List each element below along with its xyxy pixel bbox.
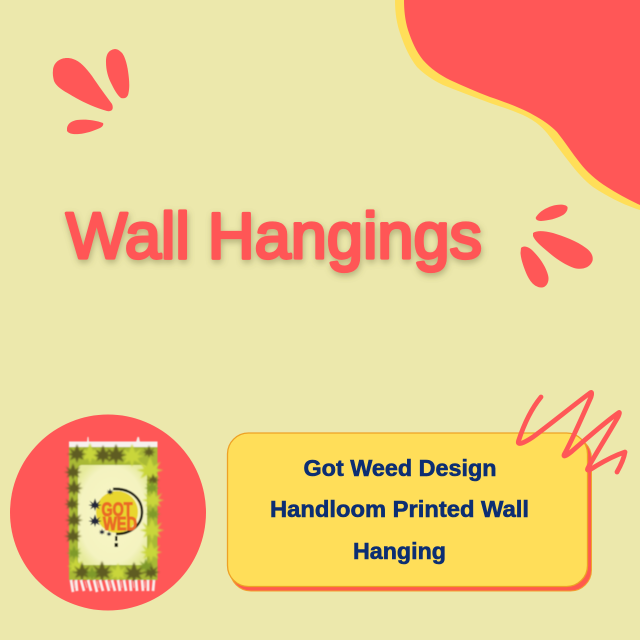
fringe — [71, 580, 154, 592]
Got Weed logo: WED — [103, 514, 137, 534]
corner blob: yellow outline and red shape — [395, 0, 640, 210]
card face — [228, 433, 588, 586]
splash icon right of title — [520, 205, 593, 288]
scribble decoration — [518, 392, 625, 472]
Got Weed logo — [88, 488, 142, 547]
logo wording: GOT — [102, 500, 133, 521]
logo disc — [96, 491, 138, 533]
hanging pins — [87, 437, 140, 442]
fabric — [69, 447, 158, 580]
splash icon top left — [53, 49, 129, 134]
title: Wall Hangings — [66, 199, 482, 272]
cream centre — [78, 465, 147, 565]
small leaf stars — [88, 488, 114, 536]
top rod — [69, 442, 158, 448]
logo ring — [113, 489, 142, 534]
question mark stem — [114, 536, 118, 547]
card text: Got Weed Design — [304, 455, 496, 481]
product label card — [228, 433, 592, 591]
leaf border — [64, 443, 164, 583]
card text — [270, 455, 529, 564]
wall hanging product photo — [64, 437, 164, 592]
circle backdrop — [10, 414, 206, 610]
card shadow — [230, 437, 592, 591]
product circle with wall hanging — [10, 414, 206, 610]
card text: Handloom Printed Wall — [270, 496, 529, 522]
card text: Hanging — [353, 538, 446, 564]
